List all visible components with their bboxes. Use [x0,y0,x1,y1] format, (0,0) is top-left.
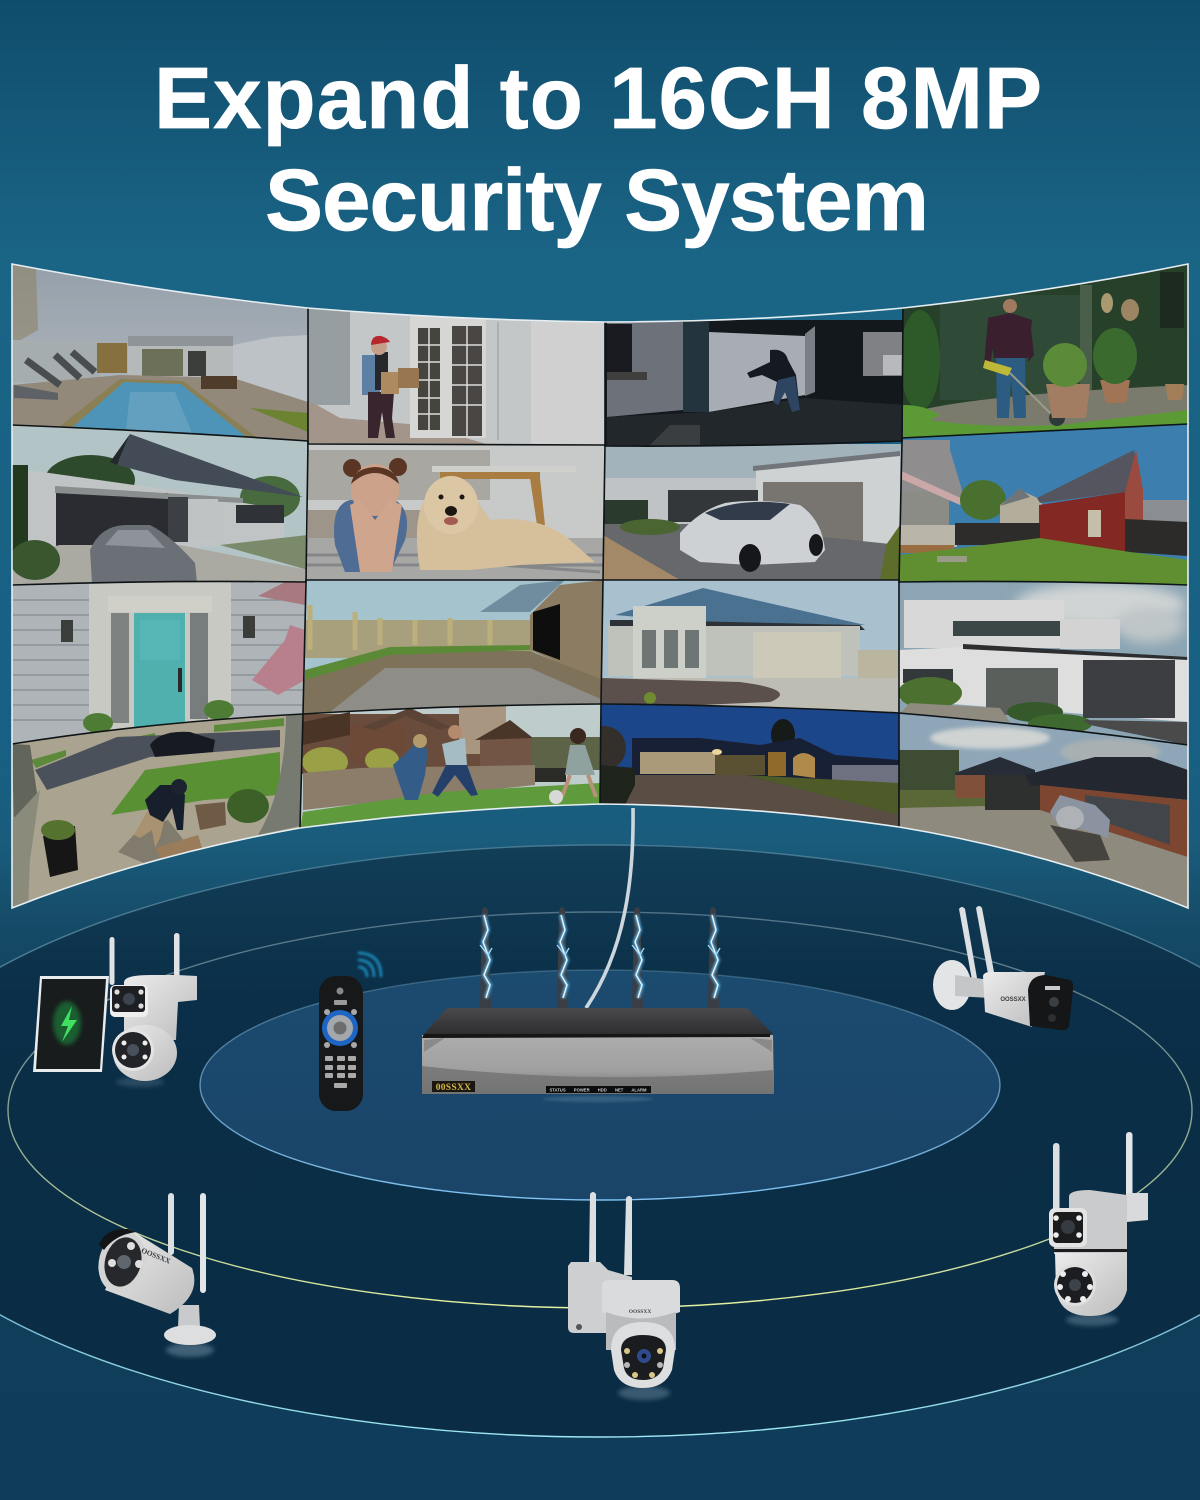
feed: house with grey car [10,424,308,590]
PTZ camera bottom centre [568,1192,680,1400]
camera logo: OOSSXX [140,1246,172,1266]
camera barrel [105,1230,194,1314]
upper body [1054,1190,1127,1254]
feed: burglar at garage [605,320,905,450]
title line 1: Expand to 16CH 8MP [154,50,1042,147]
camera head [602,1280,680,1319]
cable to NVR [586,808,633,1008]
remote body [319,976,363,1111]
recorder top [424,1008,773,1034]
dual lens camera right [1049,1132,1148,1326]
camera body [983,972,1045,1027]
antennas [110,937,114,985]
mount base [164,1305,216,1345]
feed: terrace with fence [303,580,605,720]
feed: parcel at doorstep [12,712,308,912]
title [154,50,1042,249]
lower dome [1054,1253,1127,1316]
lower dome [112,1025,177,1081]
antennas [959,907,977,980]
floor rings [0,845,1200,1437]
lightning on antennas [480,915,720,998]
feed: white electric car [603,444,903,585]
antennas [168,1193,174,1255]
camera dome [611,1322,675,1388]
camera front [1028,975,1073,1030]
curved video wall [10,260,1189,915]
upper lens [110,985,148,1017]
feed: red barn house [899,424,1189,590]
video wall separators [12,308,1188,828]
brand label: 00SSXX [436,1083,471,1093]
camera logo: OOSSXX [1000,997,1026,1003]
feed: girl and dog [306,444,606,581]
feed: delivery at door [308,305,607,447]
solar panel [33,976,109,1072]
recorder front [422,1035,774,1094]
feed: pool [12,260,308,445]
wall mount [933,960,971,1010]
antennas [1053,1143,1060,1213]
video wall frame [12,264,1188,908]
base reflection [166,1343,214,1357]
bracket [1127,1193,1148,1222]
title line 2: Security System [265,152,929,249]
feed: man trimming lawn [900,262,1189,445]
NVR recorder with antennas [422,907,774,1102]
navigation ring [322,1010,358,1046]
feed: silver SUV at gravel drive [899,712,1189,915]
lightning glow [483,915,718,998]
remote control [319,953,381,1111]
upper lens [1049,1208,1087,1247]
brand label [432,1081,475,1093]
camera logo: OOSSXX [629,1309,651,1315]
bullet camera right [933,906,1073,1030]
signal waves [358,953,381,977]
antennas [589,1192,596,1263]
bullet camera left [92,1193,216,1357]
camera face [92,1226,152,1298]
feed: turquoise front door [12,580,308,750]
antennas [480,907,719,1008]
inner ring [200,970,1000,1200]
camera upper body [124,975,197,1040]
feed: grey house and driveway [601,578,901,716]
outer ring [0,845,1200,1437]
feed: family in yard [300,702,602,832]
status strip [546,1086,651,1093]
status strip: STATUS POWER HDD NET ALARM [549,1088,647,1092]
feed: modern white house [897,580,1189,750]
wall bracket [568,1262,632,1333]
middle ring [8,912,1192,1308]
feed: house at dusk [600,704,898,826]
solar panel camera [33,933,197,1087]
